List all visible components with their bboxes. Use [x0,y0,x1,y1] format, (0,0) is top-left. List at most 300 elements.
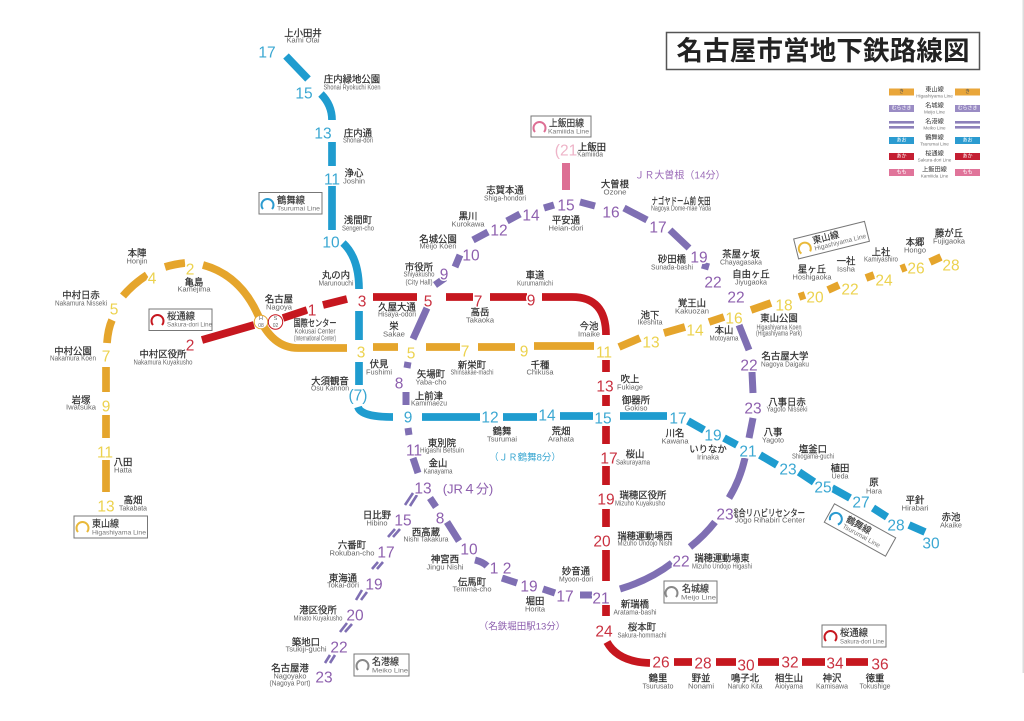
station numbers: Sakura-dori: 20 [593,534,611,550]
station: Motoyama: Motoyama [710,336,739,342]
badge: Kamiiida Line: 上飯田線 [549,118,585,128]
station numbers: Tsurumai [258,44,940,552]
interchange: Nagoya H08 and S02: H [259,316,263,322]
transfer note: JR Tsurumai: （ＪＲ鶴舞8分） [489,452,561,464]
station: Kokusai Center: Kokusai Center [294,328,336,336]
legend: あか [962,152,973,160]
station: Aioiyama [775,672,803,690]
station: Motoyama: 本山 [715,324,733,336]
line: Meijo [406,202,753,595]
legend: 名港線 [925,118,945,126]
station: Aratama-bashi: Aratama-bashi [614,610,657,616]
station: Kami Otai: Kami Otai [286,38,320,44]
station: Heian-dori: Heian-dori [548,226,584,232]
line: Kamiiida [562,163,570,190]
station: Jingu Nishi: 神宮西 [431,554,459,564]
station: Sunada-bashi: 砂田橋 [658,254,687,264]
station numbers: Tsurumai: 19 [704,428,722,444]
station: Hoshigaoka [792,264,832,282]
station: Shonai Ryokuchi Koen [324,74,381,92]
station: Honjin: Honjin [126,258,148,266]
station numbers: Higashiyama: 13 [97,498,115,516]
station: Nishi Takakura: Nishi Takakura [404,536,449,544]
station: Hongo: 本郷 [906,236,925,248]
station: Hara [866,476,882,496]
station: Aioiyama: 相生山 [775,672,803,684]
badge: Higashiyama Line left [74,516,148,538]
station: Kokusai Center: 国際センター [294,318,336,328]
station: Kamejima [178,276,211,294]
station: Kamisawa [816,672,848,690]
station: Chikusa: 千種 [531,360,550,370]
station: Hibino [363,510,392,528]
station: Fushimi [366,358,392,376]
station: Heian-dori [548,214,584,232]
station numbers: Meijo and Meiko: 16 [602,204,620,222]
station numbers: Sakura-dori: 24 [595,624,613,640]
station numbers: Meijo and Meiko: 9 [440,266,448,284]
station: Heian-dori: 平安通 [552,214,581,226]
station numbers: Sakura-dori: 34 [826,656,844,672]
station: Meijo Koen [419,234,457,250]
station: Fujigaoka: Fujigaoka [933,238,965,246]
station: Yagoto [762,426,784,444]
station: Marunouchi [318,270,354,288]
station: Honjin: 本陣 [128,248,146,258]
legend: あか [896,152,907,160]
station: Sakae [383,320,405,338]
station: Shiyakusho: 市役所 [405,262,434,272]
station: Rokuban-cho: Rokuban-cho [330,550,375,558]
station: Kamejima: Kamejima [178,286,211,294]
station: Shonai-dori [343,128,373,144]
station: Kamimaezu: 上前津 [415,390,443,402]
station: Aioiyama: Aioiyama [775,684,803,690]
station: Horita [525,596,545,614]
station: Hirabari: 平針 [906,494,925,506]
badge: Higashiyama Line right [794,221,869,259]
station: Issha: Issha [837,266,855,274]
station numbers: Sakura-dori: 36 [871,656,889,674]
station numbers: Higashiyama: 14 [686,322,704,340]
station numbers: Meijo and Meiko: 14 [522,208,540,224]
station: Higashi Betsuin: Higashi Betsuin [420,448,464,454]
station: Nakamura Kuyakusho: Nakamura Kuyakusho [134,360,193,366]
legend: もも [962,170,973,176]
station: Naruko Kita: Naruko Kita [728,684,763,690]
station: Yagoto: 八事 [764,426,782,438]
station: Irinaka [689,444,727,462]
station: Yagoto Nisseki: Yagoto Nisseki [766,406,808,414]
station: Ozone: 大曽根 [601,178,630,190]
station numbers: Higashiyama: 7 [461,344,469,360]
station: Sakurayama: 桜山 [626,448,644,460]
station: Sengen-cho [342,214,374,232]
station: Jiyugaoka: 自由ヶ丘 [732,268,770,280]
station: Kanayama: 金山 [429,458,447,468]
station: Mizuho Kuyakusho: Mizuho Kuyakusho [615,500,665,508]
station: Hara: 原 [869,476,879,488]
station numbers: Tsurumai: (7) [349,388,367,404]
badge: Sakura-dori Line left: 桜通線 [167,310,196,322]
station: Nakamura Nisseki [55,290,107,308]
station: Minato Kuyakusho: 港区役所 [299,604,337,616]
station numbers: Higashiyama: 20 [806,290,824,306]
station: Naruko Kita: 鳴子北 [731,672,760,684]
station: Temma-cho: Temma-cho [452,586,492,594]
station: Sunada-bashi: Sunada-bashi [651,264,693,272]
station: Shiogama-guchi: Shiogama-guchi [792,454,834,460]
station: Meijo Koen: 名城公園 [419,234,457,244]
station: Nagoya [265,294,293,312]
station numbers: Meijo and Meiko: 19 [690,250,708,266]
station numbers: Higashiyama: 2 [186,262,194,278]
station numbers: Tsurumai: 13 [314,126,332,142]
station: Shiga-hondori: Shiga-hondori [484,196,526,202]
station numbers: Meijo and Meiko: 15 [394,512,412,530]
station: Sengen-cho: Sengen-cho [342,226,374,232]
station numbers: Tsurumai: 11 [324,172,340,188]
station numbers: Meijo and Meiko: 19 [520,578,538,596]
station numbers: Higashiyama: 5 [110,302,118,318]
station: Kakuozan: 覚王山 [678,298,706,308]
station: Mizuho Undojo Nishi [618,530,673,548]
station: Kawana: Kawana [662,438,689,446]
station: Temma-cho [452,576,492,594]
station: Yagoto Nisseki [766,396,808,414]
station: Kurumamichi [517,270,553,288]
station: Iwatsuka: Iwatsuka [66,404,96,412]
station: Kamiyashiro: Kamiyashiro [864,256,898,264]
station numbers: Sakura-dori: 5 [424,294,432,310]
station: Takabata: Takabata [119,506,147,512]
station numbers: Sakura-dori: 30 [737,658,755,674]
legend: Meijo Line [924,110,945,114]
station: Tokushige: 徳重 [866,672,884,684]
station numbers: Tsurumai: 23 [779,462,797,478]
station: Hoshigaoka: 星ヶ丘 [798,264,826,274]
station: Irinaka: Irinaka [697,454,719,462]
legend: き [899,88,904,95]
badge: Sakura-dori Line left [149,309,212,330]
station: Minato Kuyakusho [294,604,343,622]
station: Mizuho Undojo Higashi: Mizuho Undojo Higashi [692,564,752,570]
station: Takaoka [466,306,494,324]
station: Kawana: 川名 [666,428,684,438]
station: Tokai-dori: 東海通 [329,572,358,584]
station: Hisaya-odori: Hisaya-odori [378,312,416,318]
station: Shiogama-guchi: 塩釜口 [799,444,827,454]
station: Kanayama [424,458,453,476]
badge: Tsurumai Line top [259,192,322,214]
station: Jogo Rihabiri Center: Jogo Rihabiri Center [735,518,806,524]
station: Osu Kannon: 大須観音 [311,376,349,386]
station: Ueda [831,462,849,480]
station: Mizuho Kuyakusho [615,490,667,508]
station: Yagoto Nisseki: 八事日赤 [768,396,806,408]
station: Shonai-dori: Shonai-dori [343,138,373,144]
station numbers: Meijo and Meiko: 21 [592,590,610,608]
station: Gokiso [622,394,651,412]
legend: 上飯田線 [922,166,948,174]
station: Nakamura Nisseki: 中村日赤 [62,290,100,300]
station: Shiga-hondori: 志賀本通 [486,184,524,196]
badge: Higashiyama Line left: 東山線 [92,518,120,529]
station: Shinsakae-machi [450,360,494,376]
station number: Kamiiida: (21 [555,142,577,160]
station: Nakamura Koen: Nakamura Koen [50,356,96,362]
station: Joshin [343,168,365,186]
station: Rokuban-cho: 六番町 [338,540,367,550]
station: Higashiyama Koen: 東山公園 [760,312,798,324]
station numbers: Tsurumai: 28 [887,518,905,534]
station: Higashi Betsuin [420,438,464,454]
station: Tsukiji-guchi [286,636,327,654]
station: Nagoya Dome-mae Yada [651,196,711,212]
station: Shiga-hondori [484,184,526,202]
legend: 桜通線 [925,150,945,158]
station numbers: Meijo and Meiko: 23 [716,506,734,524]
station: Mizuho Undojo Nishi: Mizuho Undojo Nishi [618,540,673,548]
station numbers: Meijo and Meiko: 10 [462,248,480,264]
station: Ueda: Ueda [832,474,849,480]
station: Fushimi: 伏見 [370,358,388,370]
legend: もも [896,170,907,176]
legend: むらさき [957,104,978,112]
station: Kamejima: 亀島 [185,276,203,288]
station: Ikeshita: 池下 [641,310,659,320]
station: Tsurumai [487,426,517,444]
station: Fushimi: Fushimi [366,370,392,376]
station: Chikusa [526,360,554,376]
legend [889,86,980,178]
station: Kami Otai [284,28,322,44]
station: Arahata: 荒畑 [552,426,570,436]
station: Jogo Rihabiri Center: 総合リハビリセンター [731,508,805,518]
station: Nakamura Koen: 中村公園 [54,346,92,356]
station numbers: Meijo and Meiko: 22 [330,640,348,656]
station numbers: Sakura-dori: 3 [358,294,366,310]
station: Fukiage: Fukiage [617,384,643,392]
station: Higashi Betsuin: 東別院 [428,438,456,448]
station: Arahata [548,426,574,444]
station: Nagoya Daigaku: 名古屋大学 [762,350,808,362]
station: Kamimaezu [411,390,447,408]
station numbers: Tsurumai: 15 [295,86,313,102]
station: Gokiso: Gokiso [624,406,648,412]
station: Myoon-dori: 妙音通 [562,566,591,576]
line: Meiko [325,493,417,663]
station numbers: Higashiyama: 9 [520,344,528,360]
station: Sakurayama [616,448,650,466]
station numbers: Meijo and Meiko: 15 [557,198,575,214]
station: Osu Kannon: Osu Kannon [311,386,349,392]
station: Irinaka: いりなか [689,444,727,454]
station numbers: Higashiyama: 28 [942,258,960,274]
station numbers: Higashiyama: 9 [102,398,110,416]
station: Kamiiida [577,142,606,158]
station: Joshin: 浄心 [345,168,364,178]
station: Mizuho Undojo Higashi: 瑞穂運動場東 [694,552,750,564]
station numbers: Meijo and Meiko: 13 [414,480,432,498]
station: Kakuozan: Kakuozan [675,308,709,316]
station: Shinsakae-machi: 新栄町 [458,360,487,370]
station: Hirabari: Hirabari [902,506,929,512]
station: Iwatsuka: 岩塚 [72,394,91,406]
station: Imaike [578,320,600,338]
station: Jiyugaoka [732,268,770,286]
station: Hara: Hara [866,488,882,496]
station: Yaba-cho [416,368,447,386]
line: Sakura-dori [202,297,868,663]
station numbers: Meijo and Meiko: 19 [365,576,383,594]
station numbers: Meijo and Meiko: 23 [744,400,762,418]
station numbers: Meijo and Meiko: 17 [377,544,395,562]
station numbers: Higashiyama: 13 [642,334,660,352]
station: Hatta: 八田 [114,456,132,468]
station: Nagoya Dome-mae Yada: ナゴヤドーム前 矢田 [652,196,710,206]
legend: あお [896,136,907,144]
station numbers: Tsurumai: 14 [538,408,556,424]
station numbers: Meijo and Meiko: 22 [740,358,758,374]
badge: Sakura-dori Line bottom [822,625,886,647]
legend: Tsurumai Line [920,142,949,146]
title: 名古屋市営地下鉄路線図 [676,36,970,66]
legend: Higashiyama Line [916,94,953,98]
station numbers: Sakura-dori: 9 [527,292,535,310]
legend: むらさき [891,104,912,112]
badge: Sakura-dori Line left: Sakura-dori Line [167,322,212,328]
station numbers: Sakura-dori: 26 [652,654,670,672]
line: Tsurumai [286,56,925,532]
station: Hatta [114,456,132,474]
station: Horita: 堀田 [526,596,544,606]
station: Sakura-hommachi [618,622,667,640]
station: Jingu Nishi: Jingu Nishi [426,564,464,572]
station: Nagoyako: (Nagoya Port) [270,680,310,688]
station: Hirabari [902,494,929,512]
station: Sakura-hommachi: Sakura-hommachi [618,632,667,640]
station numbers: Meijo and Meiko: 22 [672,554,690,570]
station: Arahata: Arahata [548,436,574,444]
station: Fujigaoka: 藤が丘 [935,228,963,238]
station numbers: Higashiyama: 11 [97,444,113,462]
station: Fukiage [617,374,643,392]
station numbers: Higashiyama: 22 [841,282,859,298]
station numbers: Tsurumai: 12 [481,410,499,426]
station numbers: Meijo and Meiko: 1 [490,560,498,578]
station numbers: Meijo and Meiko: 11 [406,442,422,460]
badge: Sakura-dori Line bottom: 桜通線 [840,627,869,638]
interchange: Nagoya H08 and S02 [254,315,283,329]
station: Yaba-cho: 矢場町 [417,368,446,380]
station numbers: Tsurumai: 17 [258,44,276,62]
station: Issha: 一社 [837,256,856,266]
station: Kokusai Center: (International Center) [294,336,336,342]
station: Kamiyashiro [864,246,898,264]
station: Takabata: 高畑 [124,494,142,506]
badge: Higashiyama Line left: Higashiyama Line [92,530,146,536]
station: Sakura-hommachi: 桜本町 [628,622,657,632]
station: Shonai-dori: 庄内通 [344,128,373,138]
station numbers: Higashiyama: 5 [407,346,415,362]
station numbers: Meijo and Meiko: 22 [727,290,745,306]
station: Fujigaoka [933,228,965,246]
station: Kawana [662,428,689,446]
badge: Meiko Line: 名港線 [372,656,400,667]
station: Tokushige [860,672,891,690]
station numbers: Meijo and Meiko: 20 [346,608,364,624]
station: Nagoyako: 名古屋港 [271,662,309,674]
station: Kamisawa: Kamisawa [816,684,848,690]
station: Chayagasaka [720,248,762,266]
station numbers: Meijo and Meiko: 10 [460,542,478,558]
station: Tsurusato: Tsurusato [642,684,674,690]
station numbers: Sakura-dori: 1 [308,302,316,320]
station: Sengen-cho: 浅間町 [344,214,373,226]
station: Hisaya-odori: 久屋大通 [378,302,416,312]
station numbers: Higashiyama: 11 [596,344,612,362]
badge: Sakura-dori Line bottom: Sakura-dori Line [840,638,884,646]
station numbers: Meijo and Meiko: 22 [704,274,722,292]
station: Ueda: 植田 [831,462,849,474]
station numbers: Tsurumai: 10 [322,234,340,252]
station: Ikeshita [638,310,663,326]
station: Nishi Takakura [404,526,449,544]
station: Shiyakusho: Shiyakusho [404,272,435,278]
station: Kurokawa [452,210,485,228]
badge: Meiko Line: Meiko Line [372,668,408,674]
station: Temma-cho: 伝馬町 [458,576,487,588]
station numbers: Sakura-dori: 17 [600,450,618,468]
station numbers: Higashiyama: 4 [148,270,157,288]
interchange: Nagoya H08 and S02: S [274,316,278,322]
station: Nakamura Kuyakusho [134,348,193,366]
station numbers: Meijo and Meiko: 2 [503,560,511,578]
station numbers: Meijo and Meiko: 8 [436,510,444,528]
badge: Higashiyama Line right: 東山線 [811,228,841,246]
station: Kamimaezu: Kamimaezu [411,400,447,408]
station: Takabata [119,494,147,512]
legend: 名城線 [925,102,945,110]
station: Tsurumai: Tsurumai [487,436,517,444]
station: Kanayama: Kanayama [424,468,453,476]
station: Kami Otai: 上小田井 [284,28,322,38]
station: Shonai Ryokuchi Koen: Shonai Ryokuchi Koen [324,84,381,92]
line: Higashiyama [106,257,941,492]
station: Tsukiji-guchi: Tsukiji-guchi [286,646,327,654]
station: Akaike: Akaike [940,522,962,530]
station: Ozone [601,178,630,196]
badge: Tsurumai Line top: Tsurumai Line [277,206,320,212]
station: Nishi Takakura: 西高蔵 [412,526,441,538]
station: Ozone: Ozone [604,190,627,196]
badge: Meijo Line [664,581,717,603]
station: Kamiiida: Kamiiida [577,152,603,158]
station numbers: Sakura-dori: 13 [596,378,614,396]
station: Hongo [904,236,926,254]
legend: あお [962,136,973,144]
station: Myoon-dori [559,566,593,584]
station: Issha [837,256,856,274]
badge: Higashiyama Line right: Higashiyama Line [814,233,867,253]
station: Sunada-bashi [651,254,693,272]
station: Tokushige: Tokushige [860,684,891,690]
station: Tokai-dori: Tokai-dori [327,582,359,590]
station numbers: Sakura-dori: 19 [597,492,615,508]
station: Nakamura Kuyakusho: 中村区役所 [140,348,187,360]
station numbers: Sakura-dori: 32 [781,654,799,672]
